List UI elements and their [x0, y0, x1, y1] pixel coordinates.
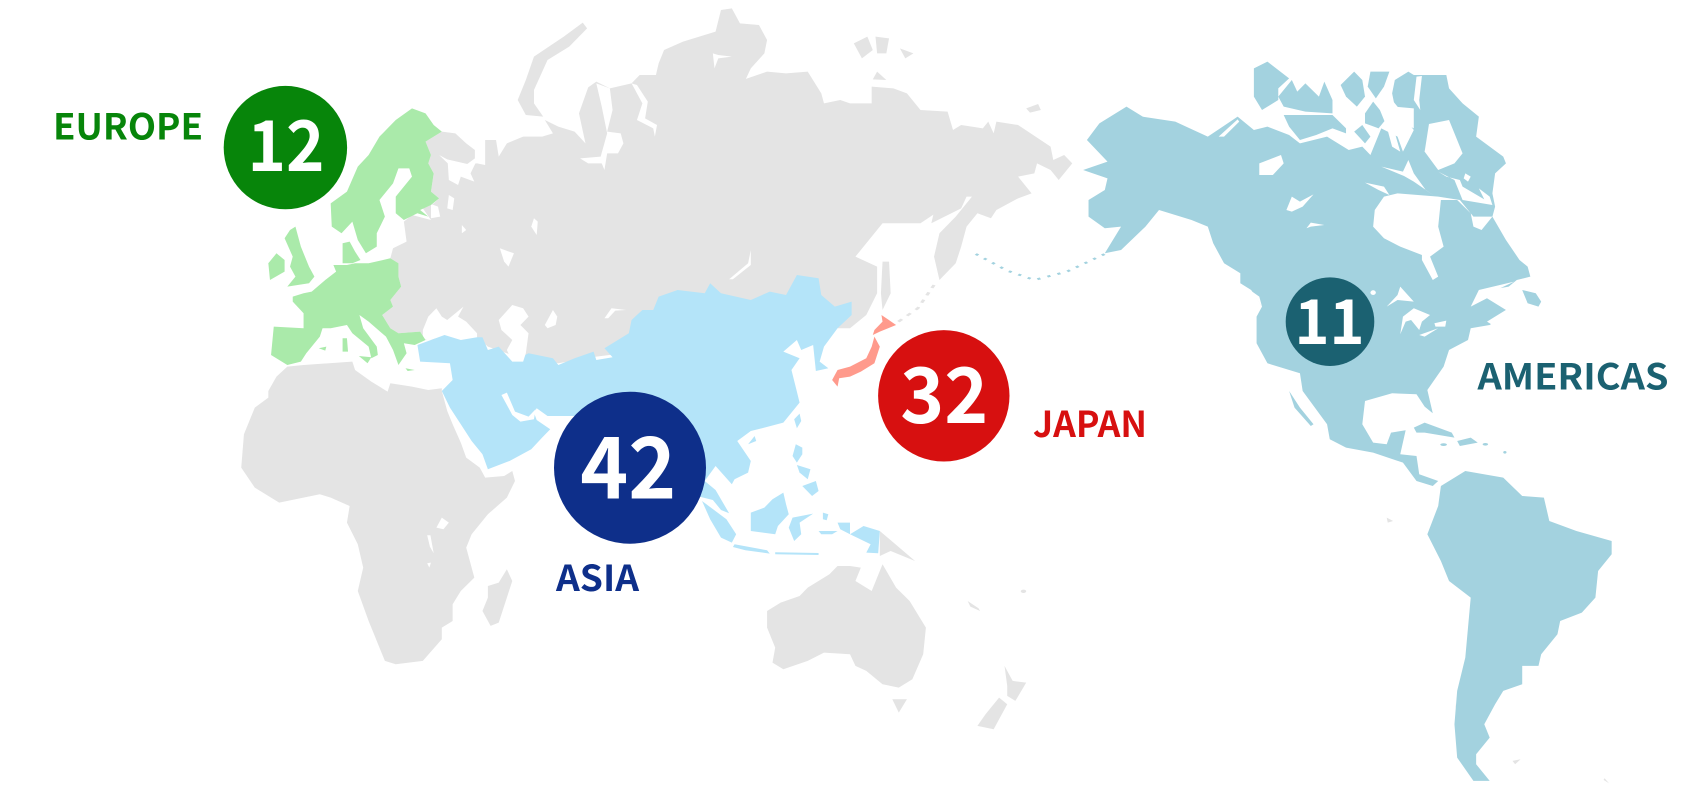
Europe mainland — [271, 258, 426, 365]
land: Arctic islands grey — [518, 23, 1041, 310]
Atlantic Canada — [1522, 290, 1541, 307]
Mediterranean islands — [343, 338, 348, 352]
land: Europe green — [268, 108, 442, 371]
land: Asia blue — [417, 275, 852, 513]
Caspian and Aral seas — [499, 305, 557, 362]
Scandinavia — [331, 108, 442, 253]
Caribbean islands — [1414, 423, 1454, 438]
Great Britain — [285, 227, 314, 287]
badge: Japan 32: 32 — [900, 335, 988, 446]
land: Americas blue — [1083, 62, 1612, 781]
badge: Asia 42: 42 — [580, 400, 676, 523]
label: Asia: ASIA — [555, 550, 640, 602]
world map — [241, 8, 1612, 783]
Persian Gulf — [501, 393, 536, 422]
land: Southeast Asia islands blue — [702, 414, 880, 555]
Aleutian islands — [976, 254, 1105, 280]
label: Americas: AMERICAS — [1476, 348, 1668, 400]
land: Australia, New Zealand and New Guinea grey — [767, 518, 1609, 783]
African lakes — [427, 518, 449, 568]
Canadian Arctic islands — [1254, 62, 1289, 110]
inland seas and gulfs of Eurasia — [431, 53, 751, 318]
land: Eurasia grey — [382, 8, 1072, 363]
badge: Asia 42 — [554, 392, 706, 544]
land: Madagascar grey — [482, 569, 512, 626]
land: Africa grey — [241, 362, 515, 664]
Black Sea — [423, 307, 477, 341]
badge: Japan 32 — [878, 330, 1010, 461]
Kuril islands — [896, 285, 934, 323]
Denmark — [343, 242, 360, 263]
label: Japan: JAPAN — [1033, 396, 1147, 448]
North America — [1083, 72, 1530, 486]
label: Europe: EUROPE — [53, 98, 203, 150]
land: Japan red — [832, 315, 896, 387]
badge: Europe 12 — [224, 86, 347, 209]
Ireland — [268, 253, 285, 280]
South America — [1427, 471, 1612, 781]
Hudson Bay, lakes and channels of North America — [1214, 76, 1514, 337]
badge: Americas 11: 11 — [1294, 272, 1364, 362]
Baja California — [1289, 391, 1314, 426]
badge: Europe 12: 12 — [248, 91, 324, 192]
